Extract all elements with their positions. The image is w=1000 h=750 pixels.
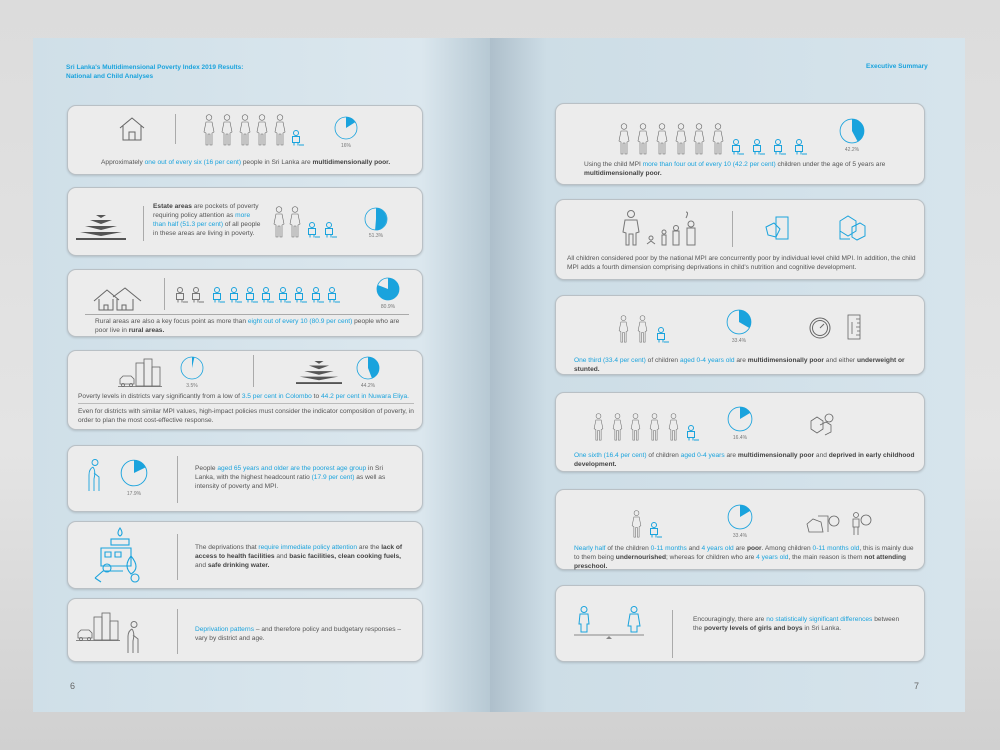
pie: 17.9% — [120, 460, 148, 486]
panel: nearly half — [555, 489, 925, 570]
panel: one third underweight — [555, 295, 925, 375]
panel: one sixth early childhood: 16.4% — [733, 435, 747, 441]
pie: 44.2% — [356, 356, 380, 380]
header right: Executive Summary — [866, 63, 928, 70]
pie: 16.4% — [728, 406, 752, 432]
icon: people row — [594, 413, 699, 440]
panel: one sixth early childhood: One sixth (16.4 per cent) of children aged 0-4 years are multidimensionally poor and deprived in early childhood development. — [574, 452, 914, 468]
panel: rural areas — [67, 269, 423, 337]
panel: districts: Poverty levels in districts vary significantly from a low of 3.5 per cent in Colombo to 44.2 per cent in Nuwara Eliya. — [78, 393, 409, 400]
icon: blocks — [840, 215, 866, 241]
header left: National and Child Analyses — [66, 73, 153, 80]
icon: city and elderly — [76, 612, 138, 653]
header left — [66, 64, 243, 80]
panel: aged 65 — [67, 445, 423, 512]
pie: 33.4% — [728, 504, 752, 530]
panel: districts: Even for districts with similar MPI values, high-impact policies must consider the indicator composition of poverty, in order to plan the most cost-effective response. — [78, 408, 414, 424]
icon: life stages — [622, 210, 696, 246]
icon: city — [118, 358, 162, 387]
panel: child MPI dimension: All children considered poor by the national MPI are concurrently poor by individual level child MPI. In addition, the child MPI adds a fourth dimension comprising deprivations in child's nutrition and cognitive development. — [567, 255, 916, 271]
icon: scale gauge — [810, 318, 830, 338]
panel: estate areas: Estate areas are pockets of poverty requiring policy attention as more than half (51.3 per cent) of all people in these areas are living in poverty. — [153, 203, 260, 237]
icon: rural houses — [94, 288, 142, 310]
panel: child MPI 42.2%: Using the child MPI more than four out of every 10 (42.2 per cent) children under the age of 5 years are multidimensionally poor. — [584, 161, 885, 177]
panel: estate areas: 51.3% — [369, 233, 383, 239]
panel: aged 65: 17.9% — [127, 491, 141, 497]
panel: one sixth early childhood — [555, 392, 925, 472]
panel: girls and boys: Encouragingly, there are no statistically significant differences between the poverty levels of girls and boys in Sri Lanka. — [693, 616, 899, 632]
icon: blocks crossed — [810, 414, 834, 436]
panel: one third underweight: One third (33.4 per cent) of children aged 0-4 years old are multidimensionally poor and either underweight or stunted. — [574, 357, 905, 373]
page number left: 6 — [70, 681, 75, 691]
panel: one in six poor: Approximately one out of every six (16 per cent) people in Sri Lanka are multidimensionally poor. — [101, 159, 390, 166]
panel: districts: 44.2% — [361, 383, 375, 389]
pie: 51.3% — [364, 208, 388, 230]
icon: nutrition — [765, 216, 788, 240]
panel: one in six poor: 16% — [341, 143, 351, 149]
header left: Sri Lanka's Multidimensional Poverty Index 2019 Results: — [66, 64, 243, 71]
icon: height ruler — [848, 314, 860, 340]
icon: family — [274, 206, 337, 238]
panel: one in six poor — [67, 105, 423, 175]
icon: adult and child — [632, 510, 662, 538]
pie: 3.5% — [180, 356, 204, 380]
panel: nearly half: Nearly half of the children 0-11 months and 4 years old are poor. Among children 0-11 months old, this is mainly due to them being undernourished; whereas for children who are 4 years old, the main reason is them not attending preschool. — [574, 545, 914, 570]
icon: people row — [618, 123, 807, 154]
icon: student crossed — [852, 512, 872, 535]
icon: estate hill — [76, 215, 126, 240]
panel: rural areas: 80.9% — [381, 304, 395, 310]
icon: food crossed — [806, 516, 840, 532]
icon: children row — [176, 287, 340, 302]
icon: estate hill — [296, 361, 342, 384]
icon: people — [204, 114, 304, 146]
page: right — [490, 38, 965, 712]
panel: deprivations — [67, 521, 423, 589]
page number right: 7 — [914, 681, 919, 691]
panel: child MPI 42.2% — [555, 103, 925, 185]
pie: 42.2% — [840, 118, 864, 144]
icon: deprivations cluster — [94, 527, 140, 582]
icon: elderly person — [88, 459, 100, 491]
icon: house — [120, 118, 144, 140]
pie: 33.4% — [726, 310, 752, 334]
panel: child MPI 42.2%: 42.2% — [845, 147, 859, 153]
panel: districts: 3.5% — [186, 383, 198, 389]
pie: 80.9% — [376, 278, 400, 300]
panel: girls and boys — [555, 585, 925, 662]
icon: balance girl boy — [574, 606, 644, 639]
panel: deprivations: The deprivations that require immediate policy attention are the lack of access to health facilities and basic facilities, clean cooking fuels, and safe drinking water. — [195, 544, 402, 569]
icon: family — [618, 315, 669, 342]
panel: deprivation patterns — [67, 598, 423, 662]
panel: rural areas: Rural areas are also a key focus point as more than eight out of every 10 (80.9 per cent) people who are poor live in rural areas. — [95, 318, 399, 334]
panel: aged 65: People aged 65 years and older are the poorest age group in Sri Lanka, with the highest headcount ratio (17.9 per cent) as well as intensity of poverty and MPI. — [195, 465, 385, 490]
panel: nearly half: 33.4% — [733, 533, 747, 539]
pie: 16% — [334, 116, 358, 140]
page: left — [33, 38, 490, 712]
panel: estate areas — [67, 187, 423, 256]
panel: one third underweight: 33.4% — [732, 338, 746, 344]
panel: child MPI dimension — [555, 199, 925, 280]
panel: deprivation patterns: Deprivation patterns – and therefore policy and budgetary responses – vary by district and age. — [195, 626, 401, 642]
panel: districts — [67, 350, 423, 430]
